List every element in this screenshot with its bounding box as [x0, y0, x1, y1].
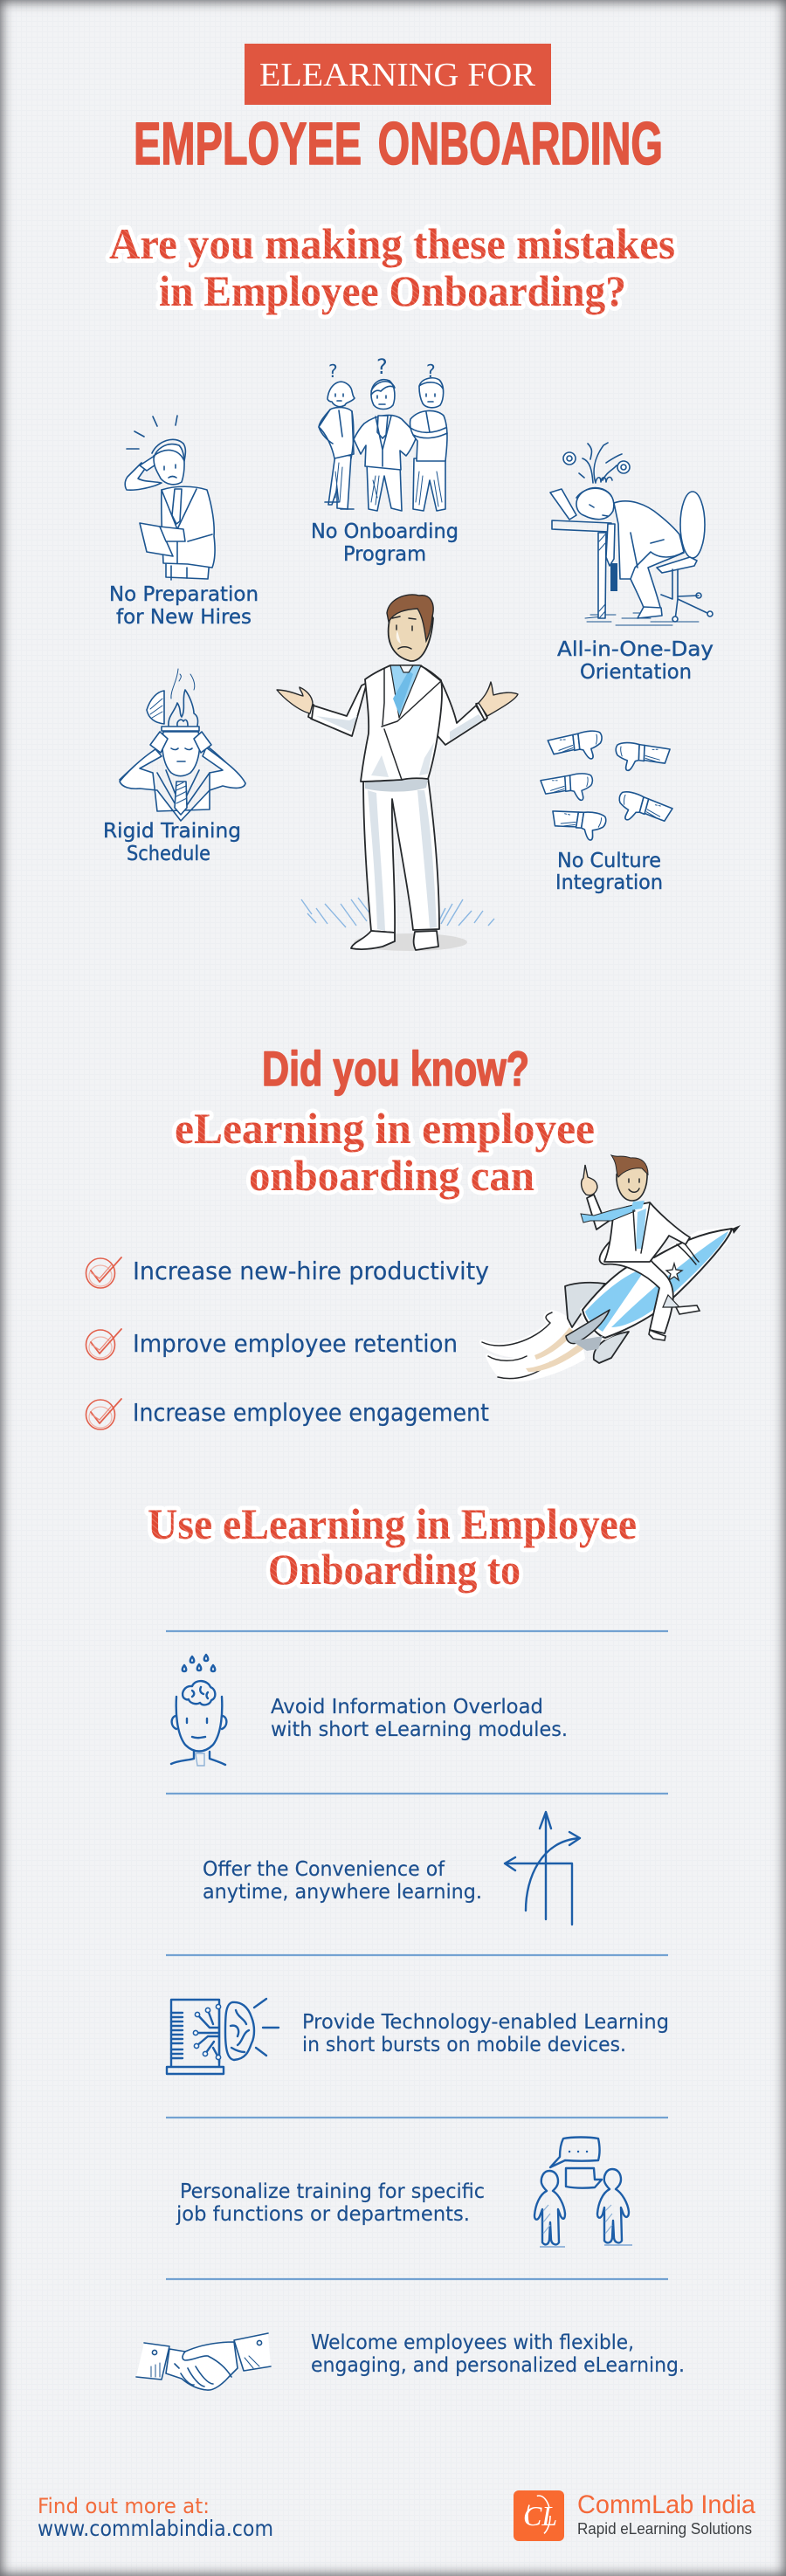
- logo: commlab india: Rapid eLearning Solutions: [577, 2520, 752, 2538]
- text: technology-enabled learning: [302, 2011, 669, 2056]
- text: personalize training: Personalize training for specific: [180, 2180, 485, 2203]
- label: all-in-one-day: Orientation: [580, 661, 692, 684]
- benefit: improve retention: Improve employee retention: [133, 1329, 458, 1358]
- heading: mistakes: Are you making these mistakes: [109, 219, 675, 268]
- heading: use elearning: Onboarding to: [268, 1545, 521, 1594]
- label: rigid training schedule: Rigid Training: [103, 820, 241, 843]
- label: no preparation: No Preparation: [109, 583, 259, 606]
- illustration: three confused people: ?: [426, 361, 436, 382]
- text: convenience: anytime, anywhere learning.: [203, 1881, 482, 1904]
- text: avoid information overload: [271, 1696, 568, 1741]
- heading: use elearning: [148, 1499, 637, 1594]
- illustration: head on fire: [120, 669, 245, 821]
- heading: mistakes: [109, 219, 675, 315]
- label: no onboarding program: [311, 520, 458, 566]
- label: rigid training schedule: [103, 820, 241, 865]
- icon: two people talking: [534, 2138, 632, 2247]
- text: personalize training: job functions or departments.: [176, 2203, 470, 2226]
- logo: commlab india: [514, 2490, 755, 2541]
- icon: circuit board and brain: [167, 1999, 279, 2074]
- footer: find out more: [38, 2494, 273, 2541]
- label: no culture integration: Integration: [555, 871, 663, 894]
- heading: elearning in employee onboarding can: [175, 1104, 595, 1200]
- icon: crossroads arrows: [505, 1812, 580, 1925]
- illustration: man riding rocket: [482, 1155, 741, 1379]
- text: avoid information overload: with short eLearning modules.: [271, 1718, 568, 1741]
- logo: commlab india: CL: [523, 2500, 557, 2531]
- label: no culture integration: [555, 850, 663, 894]
- title badge: eLearning for: ELEARNING FOR: [259, 57, 536, 93]
- label: rigid training schedule: Schedule: [127, 843, 210, 865]
- text: avoid information overload: Avoid Information Overload: [271, 1696, 543, 1718]
- label: no preparation: [109, 583, 259, 629]
- label: no preparation: for New Hires: [116, 606, 252, 629]
- heading: elearning in employee onboarding can: eLearning in employee: [175, 1104, 595, 1153]
- benefit: increase engagement: Increase employee engagement: [133, 1398, 489, 1427]
- text: convenience: [203, 1858, 482, 1904]
- heading: mistakes: in Employee Onboarding?: [159, 266, 626, 315]
- text: technology-enabled learning: Provide Technology-enabled Learning: [302, 2011, 669, 2034]
- icon: head with brain and drops: [171, 1655, 226, 1766]
- text: welcome employees: Welcome employees with flexible,: [311, 2331, 634, 2354]
- illustration: confused man with paper: [125, 416, 215, 580]
- text: convenience: Offer the Convenience of: [203, 1858, 445, 1881]
- illustration: three confused people: [319, 355, 447, 511]
- label: all-in-one-day: All-in-One-Day: [557, 638, 714, 661]
- text: welcome employees: engaging, and personalized eLearning.: [311, 2354, 685, 2377]
- label: no onboarding program: Program: [343, 543, 426, 566]
- illustration: central shrugging man in white suit: [277, 595, 518, 951]
- benefit: increase productivity: Increase new-hire productivity: [133, 1257, 489, 1285]
- text: personalize training: [176, 2180, 485, 2226]
- heading: use elearning: Use eLearning in Employee: [148, 1499, 637, 1548]
- text: welcome employees: [311, 2331, 685, 2377]
- label: no onboarding program: No Onboarding: [311, 520, 458, 543]
- heading: elearning in employee onboarding can: onboarding can: [249, 1151, 534, 1200]
- illustration: three confused people: ?: [328, 361, 338, 382]
- footer: find out more: www.commlabindia.com: [38, 2516, 273, 2541]
- icon: handshake: [136, 2333, 271, 2390]
- illustration: man asleep at desk: [550, 443, 713, 625]
- label: all-in-one-day: [557, 638, 714, 684]
- illustration: five thumbs down: [541, 731, 674, 843]
- logo: commlab india: CommLab India: [577, 2490, 755, 2519]
- footer: find out more: Find out more at:: [38, 2494, 210, 2518]
- label: no culture integration: No Culture: [557, 850, 661, 872]
- title badge: eLearning for: [245, 44, 551, 105]
- text: technology-enabled learning: in short bursts on mobile devices.: [302, 2034, 626, 2056]
- illustration: three confused people: ?: [376, 355, 388, 379]
- subheading: did you know: Did you know?: [262, 1041, 529, 1096]
